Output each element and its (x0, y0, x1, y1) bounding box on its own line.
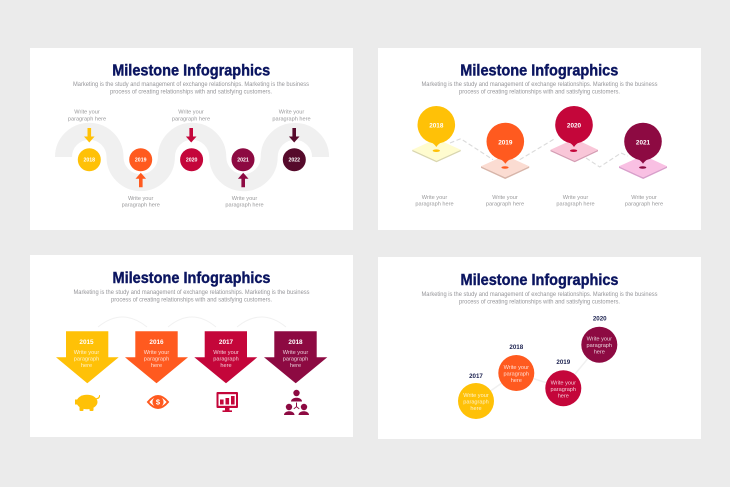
label: 2018 (68, 110, 106, 122)
icon: team hierarchy (284, 390, 309, 415)
pin 2018 (418, 106, 455, 147)
milestone 2022: 2022 (289, 158, 300, 164)
intro text: Marketing is the study and management of exchange relationships. Marketing is the business (422, 291, 658, 298)
label: 2021: paragraph here (625, 202, 663, 208)
arrow 2016: Write your (144, 350, 169, 356)
label: 2019 (486, 195, 524, 208)
heading: Milestone Infographics (112, 62, 270, 80)
arrow 2017: Write your (213, 350, 239, 356)
milestone 2017: here (470, 406, 482, 412)
milestone 2018: 2018 (84, 158, 95, 164)
label: 2022 (272, 110, 311, 122)
arrow 2017: here (220, 363, 232, 369)
intro text: process of creating relationships with and satisfying customers. (111, 296, 272, 303)
label: 2019 (122, 196, 160, 209)
pin platform 2019 (481, 155, 529, 179)
arrow 2015: here (81, 363, 92, 369)
milestone 2019: here (558, 393, 569, 399)
intro text (422, 291, 658, 305)
arrow 2016: 2016 (149, 339, 164, 346)
label: 2020 (556, 195, 595, 208)
arrow 2017 (194, 331, 257, 383)
dashed connector (450, 139, 628, 167)
arrow 2017: 2017 (219, 339, 234, 346)
milestone 2017 (458, 373, 494, 419)
milestone 2020: paragraph (587, 343, 612, 349)
arrow 2015: 2015 (79, 339, 94, 346)
icon: monitor with bars (216, 392, 238, 412)
icon: eye with dollar: $ (156, 398, 161, 407)
milestone 2019: 2019 (135, 158, 147, 164)
intro text: process of creating relationships with and satisfying customers. (459, 298, 620, 305)
milestone 2019: paragraph (551, 387, 576, 393)
milestone 2018: paragraph (504, 372, 529, 378)
label: 2021: Write your (232, 196, 257, 202)
pin platform 2018 (412, 139, 461, 162)
panel: map pin timeline (378, 48, 701, 230)
connector arcs (98, 317, 286, 327)
panel: winding path timeline (30, 48, 353, 230)
intro text: process of creating relationships with and satisfying customers. (110, 89, 272, 96)
milestone 2018 (498, 344, 534, 391)
label: 2020: Write your (178, 110, 204, 116)
arrow: 2018 down (84, 128, 95, 142)
milestone 2019: Write your (551, 380, 576, 386)
milestone 2022 (283, 148, 306, 171)
milestone 2019 (129, 148, 152, 171)
intro text (73, 81, 309, 96)
pin 2020 (555, 106, 593, 147)
pin 2021 (624, 123, 662, 164)
label: 2019: Write your (128, 196, 154, 202)
milestone 2018: Write your (504, 365, 529, 371)
intro text: Marketing is the study and management of exchange relationships. Marketing is the business (73, 81, 309, 88)
label: 2019: Write your (492, 195, 518, 201)
heading: Milestone Infographics (460, 62, 618, 80)
milestone 2020: 2020 (593, 316, 607, 322)
milestone 2017: paragraph (463, 400, 489, 406)
arrow 2018 (264, 331, 327, 383)
arrow 2017: paragraph (213, 356, 239, 362)
arrow 2016 (125, 331, 188, 383)
label: 2019: paragraph here (122, 203, 160, 209)
arrow: 2019 up (136, 173, 146, 187)
label: 2020 (172, 110, 210, 122)
pin platform 2021 (619, 155, 667, 179)
arrow 2015: paragraph (74, 356, 99, 362)
intro text: Marketing is the study and management of exchange relationships. Marketing is the business (422, 81, 658, 88)
label: 2018: Write your (422, 195, 447, 201)
label: 2021: Write your (631, 195, 657, 201)
intro text (74, 289, 310, 303)
label: 2022: Write your (279, 110, 304, 116)
label: 2019: paragraph here (486, 202, 524, 208)
arrow 2018: here (290, 363, 301, 369)
milestone 2021: 2021 (237, 158, 249, 164)
arrow: 2020 down (186, 128, 196, 142)
milestone 2020 (180, 148, 203, 171)
pin 2019 (486, 123, 524, 164)
pin 2019: 2019 (498, 139, 513, 146)
milestone 2021 (232, 148, 254, 171)
arrow 2016: paragraph (144, 356, 169, 362)
milestone 2020: 2020 (186, 158, 197, 164)
arrow: 2021 up (238, 173, 248, 187)
intro text: Marketing is the study and management of exchange relationships. Marketing is the business (74, 289, 310, 296)
arrow: 2022 down (289, 128, 300, 142)
arrow 2018: 2018 (288, 339, 303, 346)
intro text (422, 81, 658, 96)
arrow 2018: Write your (283, 350, 308, 356)
arrow 2015: Write your (74, 350, 99, 356)
milestone 2020: here (594, 350, 605, 356)
arrow 2015 (56, 331, 119, 383)
winding path (64, 131, 321, 183)
milestone 2017: 2017 (469, 373, 483, 380)
label: 2018: Write your (74, 110, 100, 116)
label: 2020: paragraph here (556, 202, 595, 208)
label: 2022: paragraph here (272, 116, 311, 122)
panel: rising circles timeline (378, 257, 701, 439)
label: 2021 (225, 196, 264, 209)
pin 2021: 2021 (636, 139, 651, 146)
milestone 2018: here (511, 378, 522, 384)
label: 2018 (415, 195, 454, 208)
label: 2021: paragraph here (225, 203, 264, 209)
milestone 2018: 2018 (509, 344, 524, 351)
label: 2020: paragraph here (172, 116, 210, 122)
pin 2018: 2018 (429, 122, 444, 130)
milestone 2020: Write your (587, 337, 612, 343)
arrow 2018: paragraph (283, 356, 308, 362)
label: 2018: paragraph here (415, 202, 454, 208)
pin platform 2020 (550, 139, 598, 162)
icon: piggy bank (75, 395, 100, 411)
label: 2021 (625, 195, 663, 208)
intro text: process of creating relationships with and satisfying customers. (459, 89, 620, 96)
milestone 2020 (581, 316, 617, 363)
pin 2020: 2020 (567, 122, 582, 130)
milestone 2018 (78, 148, 101, 171)
milestone 2019: 2019 (556, 359, 571, 366)
label: 2018: paragraph here (68, 116, 106, 122)
heading: Milestone Infographics (460, 272, 619, 289)
heading: Milestone Infographics (112, 270, 271, 287)
milestone 2019 (545, 359, 581, 406)
icon: eye with dollar (148, 396, 168, 408)
connector line (476, 345, 599, 401)
label: 2020: Write your (563, 195, 588, 201)
arrow 2016: here (151, 363, 162, 369)
panel: downward arrows timeline (30, 255, 353, 437)
milestone 2017: Write your (463, 393, 489, 399)
